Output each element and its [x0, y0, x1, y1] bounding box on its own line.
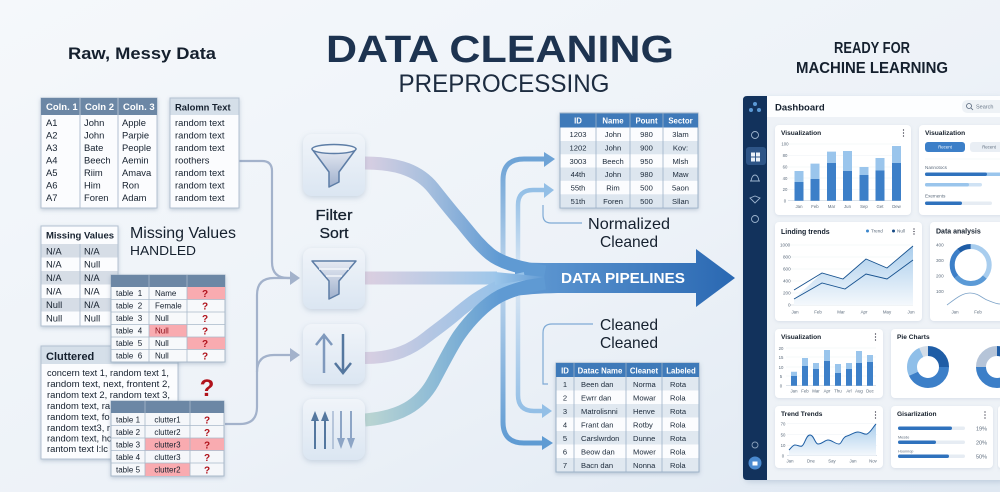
- table: cleaned output: Rola: [670, 461, 686, 470]
- table: missing values handled: Null: [155, 314, 169, 323]
- table: normalized output: 500: [640, 184, 653, 192]
- table: normalized output: 44th: [571, 170, 585, 179]
- table: missing values: Null: [84, 258, 100, 270]
- table: cleaned output: [556, 363, 699, 472]
- panel: cluttered text: random text, fo: [47, 411, 110, 422]
- table: missing values handled: ?: [202, 289, 208, 300]
- table: missing values handled: table 1: [116, 289, 143, 298]
- card: linding trends line chart: 800: [783, 254, 791, 260]
- icon: large question mark: ?: [200, 375, 214, 402]
- card: gisarlization progress: 20%: [976, 440, 987, 446]
- table: raw columns: Coln. 1: [46, 102, 78, 113]
- table: raw columns: Bate: [84, 142, 103, 153]
- table: normalized output: 500: [640, 197, 653, 206]
- panel: cluttered text: random text, ra: [47, 400, 111, 411]
- table: raw columns: Ron: [122, 180, 139, 190]
- table: clutter: clutter3: [154, 453, 181, 462]
- card: data analysis donut: Jan: [951, 310, 959, 314]
- table: normalized output: John: [605, 170, 621, 179]
- panel: cluttered text: concern text 1, random text 1,: [47, 367, 169, 378]
- callout line: cleaned: [543, 324, 593, 384]
- table: raw columns: Aemin: [122, 154, 149, 166]
- card: data analysis donut: Feb: [974, 310, 982, 314]
- flow ribbon 3: [365, 278, 525, 358]
- card: visualization with progress bars: Recent: [938, 144, 953, 150]
- flow ribbon 1: [365, 163, 545, 272]
- card: data analysis donut: 300: [936, 258, 944, 263]
- branch arrow: up to normalized table: [503, 152, 555, 262]
- card: bar chart visualization: 80: [783, 153, 788, 158]
- card: trend trends: Trend Trends: [781, 411, 823, 418]
- label: filter sort: [316, 208, 353, 242]
- table: cleaned output: 5: [563, 434, 567, 443]
- card: small bar chart visualization: Aug: [855, 388, 863, 394]
- table: raw columns: John: [84, 117, 104, 128]
- table: missing values: N/A: [46, 246, 62, 256]
- card: visualization with progress bars: Nannotocs: [925, 165, 948, 170]
- card: small bar chart visualization: 10: [779, 365, 784, 370]
- card: bar chart visualization: Sep: [860, 204, 868, 209]
- card: gisarlization progress: 19%: [976, 426, 987, 432]
- table: cleaned output: Rota: [670, 434, 687, 443]
- table: cleaned output: Bacn dan: [581, 461, 613, 470]
- card: linding trends line chart: Linding trends: [781, 229, 830, 236]
- label: normalized cleaned: Cleaned: [600, 234, 658, 251]
- table: missing values: Null: [46, 299, 62, 310]
- table: normalized output: 55th: [571, 184, 585, 192]
- dashboard header: [767, 96, 1000, 117]
- card: trend trends: Dne: [807, 458, 816, 464]
- card: data analysis donut: 200: [936, 274, 944, 278]
- card: bar chart visualization: 40: [783, 176, 788, 181]
- table: cleaned output: Matrolisnni: [581, 407, 618, 416]
- table: normalized output: 980: [640, 130, 653, 139]
- table: random text: random text: [175, 192, 225, 203]
- table: missing values: N/A: [46, 258, 62, 270]
- heading: ready for machine learning: READY FOR: [834, 40, 910, 57]
- card: trend trends: Jan: [850, 458, 857, 464]
- card: bar chart visualization: 20: [783, 187, 788, 192]
- table: clutter: ?: [204, 453, 210, 464]
- table: raw columns: A4: [46, 154, 57, 166]
- table: clutter: clutter3: [154, 440, 181, 450]
- table: raw columns: Apple: [122, 117, 146, 128]
- table: normalized output: Foren: [603, 197, 623, 206]
- label: missing values handled: Missing Values: [130, 225, 236, 242]
- table: clutter: clutter2: [154, 466, 181, 474]
- label: cleaned cleaned: Cleaned: [600, 335, 658, 352]
- label: data pipelines: DATA PIPELINES: [561, 271, 685, 287]
- card: small bar chart visualization: Arl: [846, 388, 852, 394]
- card: trend trends: 0: [782, 454, 785, 458]
- table: missing values handled: Null: [155, 339, 169, 348]
- table: raw columns: Adam: [122, 192, 147, 203]
- table: normalized output: Pount: [635, 116, 658, 126]
- table: missing values handled: Name: [155, 289, 177, 298]
- table: raw columns: Amava: [122, 167, 152, 178]
- table: missing values handled: ?: [202, 314, 208, 325]
- table: raw columns: Riim: [84, 167, 103, 178]
- table: cleaned output: ID: [561, 366, 569, 376]
- table: clutter: ?: [204, 466, 210, 476]
- card: small bar chart visualization: [775, 329, 883, 398]
- table: raw columns: Parpie: [122, 130, 149, 140]
- table: raw columns: Coln. 3: [123, 102, 155, 113]
- card: small bar chart visualization: Apr: [824, 388, 831, 394]
- table: missing values handled: [111, 275, 225, 362]
- card: small bar chart visualization: Visualization: [781, 334, 821, 341]
- icon tile: sort arrows: [303, 324, 365, 384]
- card: linding trends line chart: Jun: [907, 310, 915, 314]
- card: bar chart visualization: 0: [784, 198, 787, 204]
- card: visualization with progress bars: [919, 125, 1000, 215]
- label: filter sort: Filter: [316, 208, 353, 224]
- card: gisarlization progress: Mesde: [898, 436, 909, 440]
- card: bar chart visualization: Jun: [844, 204, 852, 209]
- table: random text: random text: [175, 130, 225, 140]
- table: random text: Ralomn Text: [175, 102, 231, 112]
- branch arrow: down to cleaned table, lower: [503, 296, 553, 450]
- heading: ready for machine learning: MACHINE LEARNING: [796, 60, 948, 77]
- branch arrow: down to cleaned table: [518, 292, 552, 418]
- dashboard header: Dashboard: [775, 102, 825, 114]
- label: normalized cleaned: Normalized: [588, 216, 670, 233]
- table: cleaned output: Norma: [633, 380, 657, 389]
- table: random text: random text: [175, 117, 225, 128]
- table: cleaned output: Cleanet: [630, 366, 658, 376]
- icon tile: funnel: [303, 134, 365, 196]
- table: cleaned output: Rola: [670, 420, 686, 430]
- table: raw columns: A6: [46, 180, 57, 190]
- table: missing values handled: table 6: [116, 352, 143, 360]
- table: raw columns: A7: [46, 192, 57, 203]
- heading: raw messy data: Raw, Messy Data: [68, 45, 217, 63]
- table: cleaned output: Rota: [670, 407, 687, 416]
- table: normalized output: 3lam: [672, 130, 689, 139]
- table: missing values: Missing Values: [46, 230, 114, 240]
- card: trend trends: 10: [781, 443, 786, 448]
- table: normalized output: Kov:: [673, 144, 688, 152]
- card: data analysis donut: 100: [936, 289, 944, 294]
- table: clutter: table 4: [116, 453, 141, 462]
- table: raw columns: People: [122, 142, 151, 153]
- heading: ready for machine learning: [796, 40, 948, 77]
- card: gisarlization progress: 50%: [976, 454, 987, 460]
- table: missing values handled: table 3: [116, 314, 143, 323]
- table: normalized output: 3003: [570, 157, 586, 166]
- table: normalized output: 5aon: [672, 184, 689, 192]
- table: normalized output: 1203: [570, 130, 586, 139]
- table: missing values: N/A: [84, 286, 100, 296]
- table: clutter: ?: [204, 428, 210, 439]
- card: bar chart visualization: 100: [781, 142, 789, 146]
- table: cleaned output: Mower: [633, 448, 656, 456]
- table: cleaned output: Been dan: [581, 380, 614, 389]
- table: missing values: N/A: [46, 286, 62, 296]
- table: missing values: Null: [84, 312, 100, 324]
- card: bar chart visualization: Mar: [828, 204, 836, 209]
- card: linding trends line chart: [775, 222, 922, 321]
- table: normalized output: Maw: [672, 170, 689, 179]
- icon tile: layered funnel: [303, 248, 365, 309]
- table: cleaned output: Carslwrdon: [581, 434, 619, 443]
- table: normalized output: 980: [640, 170, 653, 179]
- branch arrow: up to normalized table, lower: [518, 183, 554, 266]
- table: cleaned output: Henve: [633, 407, 655, 416]
- label: missing values handled: HANDLED: [130, 243, 196, 258]
- table: random text: random text: [175, 167, 225, 178]
- table: missing values handled: ?: [202, 339, 208, 350]
- table: clutter: table 1: [116, 416, 141, 424]
- table: cleaned output: 3: [563, 407, 567, 416]
- card: bar chart visualization: [775, 125, 911, 215]
- table: raw columns: Coln 2: [85, 102, 114, 113]
- card: linding trends line chart: May: [883, 310, 892, 314]
- table: missing values: N/A: [84, 246, 100, 256]
- label: missing values handled: [130, 225, 236, 258]
- table: normalized output: 1202: [570, 144, 586, 152]
- table: normalized output: [560, 113, 698, 208]
- table: clutter: table 5: [116, 466, 141, 474]
- card: small bar chart visualization: Thu: [834, 388, 842, 394]
- table: normalized output: Name: [602, 116, 624, 126]
- label: filter sort: Sort: [320, 226, 348, 242]
- panel: cluttered text: random text, next, frontent 2,: [47, 378, 170, 389]
- panel: cluttered text: Cluttered: [46, 351, 94, 363]
- table: clutter: [111, 401, 224, 476]
- arrowheads to filters: [290, 271, 300, 362]
- dashboard header: Search: [976, 104, 993, 110]
- panel: cluttered text: random text, hc: [47, 432, 112, 444]
- table: normalized output: Mlsh: [672, 157, 689, 166]
- table: missing values handled: Null: [155, 352, 169, 360]
- flow ribbon 2: [365, 272, 497, 284]
- table: normalized output: Rim: [606, 184, 620, 192]
- card: linding trends line chart: 400: [783, 278, 791, 284]
- table: normalized output: Beech: [602, 157, 624, 166]
- table: normalized output: John: [605, 130, 621, 139]
- table: missing values handled: ?: [202, 326, 208, 338]
- card: linding trends line chart: 1000: [780, 242, 791, 248]
- table: cleaned output: Beow dan: [581, 448, 615, 456]
- table: cleaned output: 7: [563, 461, 567, 470]
- card: data analysis donut: 400: [936, 242, 944, 248]
- card: small bar chart visualization: 20: [779, 346, 784, 351]
- sidebar: [743, 96, 767, 480]
- table: clutter: clutter1: [154, 416, 181, 424]
- table: cleaned output: Rola: [670, 394, 686, 402]
- title: [326, 29, 674, 98]
- table: random text: [170, 98, 239, 208]
- main arrow: pipeline body: [515, 249, 735, 307]
- card: trend trends: 70: [781, 422, 786, 426]
- table: missing values handled: table 5: [116, 339, 143, 348]
- card: linding trends line chart: 0: [788, 302, 791, 308]
- card: visualization with progress bars: Exements: [925, 194, 946, 198]
- table: cleaned output: Nonna: [633, 461, 656, 470]
- table: cleaned output: Labeled: [666, 366, 696, 376]
- table: cleaned output: Rola: [670, 448, 686, 456]
- table: missing values handled: table 4: [116, 326, 143, 336]
- table: missing values: N/A: [46, 272, 62, 283]
- label: cleaned cleaned: Cleaned: [600, 317, 658, 334]
- panel: cluttered text: random text 2, random text 3,: [47, 389, 170, 400]
- card: small bar chart visualization: Jan: [791, 388, 798, 394]
- card: trend trends: Nov: [869, 458, 878, 464]
- table: missing values: N/A: [84, 272, 100, 283]
- card: gisarlization progress: Gisarlization: [897, 411, 937, 418]
- card: small bar chart visualization: 0: [780, 384, 783, 388]
- card: linding trends line chart: 600: [783, 266, 791, 272]
- card: linding trends line chart: Null: [897, 228, 905, 234]
- table: cleaned output: Frant dan: [581, 420, 614, 430]
- card: bar chart visualization: Feb: [811, 204, 819, 209]
- card: small bar chart visualization: 5: [780, 374, 783, 379]
- table: cleaned output: 2: [563, 394, 567, 402]
- card: linding trends line chart: Trend: [871, 228, 883, 234]
- table: clutter: clutter2: [154, 428, 181, 437]
- dashboard background: [745, 96, 1000, 480]
- table: raw columns: Him: [84, 180, 101, 190]
- card: trend trends: 50: [781, 432, 786, 438]
- card: small bar chart visualization: 15: [779, 355, 784, 360]
- table: missing values handled: ?: [202, 302, 208, 312]
- card: linding trends line chart: Apr: [861, 310, 868, 314]
- flow ribbon 4: [365, 283, 545, 420]
- card: small bar chart visualization: Feb: [801, 388, 809, 394]
- card: data analysis donut: [930, 222, 1000, 321]
- table: cleaned output: 4: [563, 420, 567, 430]
- panel: cluttered text: rantom text l:lc: [47, 443, 108, 454]
- card: linding trends line chart: Feb: [814, 310, 822, 314]
- card: visualization with progress bars: Recent: [982, 144, 997, 150]
- light wedge at pipeline convergence: [495, 272, 545, 285]
- card: trend trends: Say: [828, 458, 837, 464]
- table: normalized output: 900: [640, 144, 653, 152]
- card: gisarlization progress: [891, 406, 993, 468]
- table: normalized output: Sllan: [672, 197, 689, 206]
- card: bar chart visualization: Visualization: [781, 130, 821, 137]
- table: normalized output: 950: [640, 157, 653, 166]
- table: clutter: ?: [204, 416, 210, 426]
- table: missing values: N/A: [84, 299, 100, 310]
- card: linding trends line chart: 200: [783, 290, 791, 296]
- label: cleaned cleaned: [600, 317, 658, 352]
- table: cleaned output: Ewrr dan: [581, 394, 611, 402]
- table: missing values: Null: [46, 312, 62, 324]
- table: cleaned output: Rotby: [633, 420, 653, 430]
- card: trend trends: Jan: [787, 458, 794, 464]
- card: gisarlization progress: Hoonnop: [898, 450, 913, 454]
- table: cleaned output: Mowar: [633, 394, 656, 402]
- card: bar chart visualization: Get: [877, 204, 884, 209]
- connector lines to filters: [225, 161, 292, 424]
- card: small bar chart visualization: Mar: [812, 388, 820, 394]
- table: normalized output: John: [605, 144, 621, 152]
- table: cleaned output: Dunne: [633, 434, 655, 443]
- dashboard: [743, 96, 1000, 480]
- title: PREPROCESSING: [398, 70, 610, 98]
- icon tile: multi sort arrows: [303, 399, 365, 460]
- card: bar chart visualization: Dew: [892, 204, 902, 209]
- table: random text: random text: [175, 180, 225, 190]
- table: missing values: [41, 226, 118, 326]
- label: normalized cleaned: [588, 216, 670, 251]
- table: raw columns: Beech: [84, 154, 111, 166]
- card: data analysis donut: Data analysis: [936, 228, 981, 236]
- table: normalized output: 51th: [571, 197, 585, 206]
- card: linding trends line chart: Mar: [837, 310, 845, 314]
- table: clutter: table 2: [116, 428, 141, 437]
- table: missing values handled: Null: [155, 326, 169, 336]
- table: normalized output: Sector: [668, 116, 693, 126]
- card: bar chart visualization: 60: [783, 164, 788, 170]
- card: small bar chart visualization: Dec: [866, 388, 875, 394]
- table: normalized output: ID: [574, 116, 582, 126]
- table: raw columns: A1: [46, 117, 57, 128]
- table: missing values handled: table 2: [116, 302, 143, 310]
- table: raw columns: A2: [46, 130, 57, 140]
- table: raw columns: John: [84, 130, 104, 140]
- table: missing values handled: Female: [155, 302, 182, 310]
- title: DATA CLEANING: [326, 29, 674, 71]
- callout line: normalized: [543, 205, 582, 223]
- table: raw columns: Foren: [84, 192, 108, 203]
- panel: cluttered text: [41, 346, 178, 459]
- card: pie charts: Pie Charts: [897, 334, 930, 341]
- table: clutter: table 3: [116, 440, 141, 450]
- table: raw columns: [41, 98, 157, 208]
- card: bar chart visualization: Jan: [796, 204, 803, 209]
- card: partial edge: [998, 406, 1000, 468]
- table: cleaned output: Datac Name: [578, 366, 623, 376]
- table: cleaned output: 1: [563, 380, 567, 389]
- panel: cluttered text: random text3, r: [47, 422, 110, 433]
- table: cleaned output: 6: [563, 448, 567, 456]
- table: random text: random text: [175, 142, 225, 153]
- table: raw columns: A5: [46, 167, 57, 178]
- card: pie charts: [891, 329, 1000, 398]
- card: trend trends: [775, 406, 883, 468]
- table: missing values handled: ?: [202, 352, 208, 362]
- table: clutter: ?: [204, 440, 210, 452]
- table: cleaned output: Rota: [670, 380, 687, 389]
- card: linding trends line chart: Jan: [791, 310, 799, 314]
- table: raw columns: A3: [46, 142, 57, 153]
- card: visualization with progress bars: Visualization: [925, 130, 965, 137]
- table: random text: roothers: [175, 154, 210, 166]
